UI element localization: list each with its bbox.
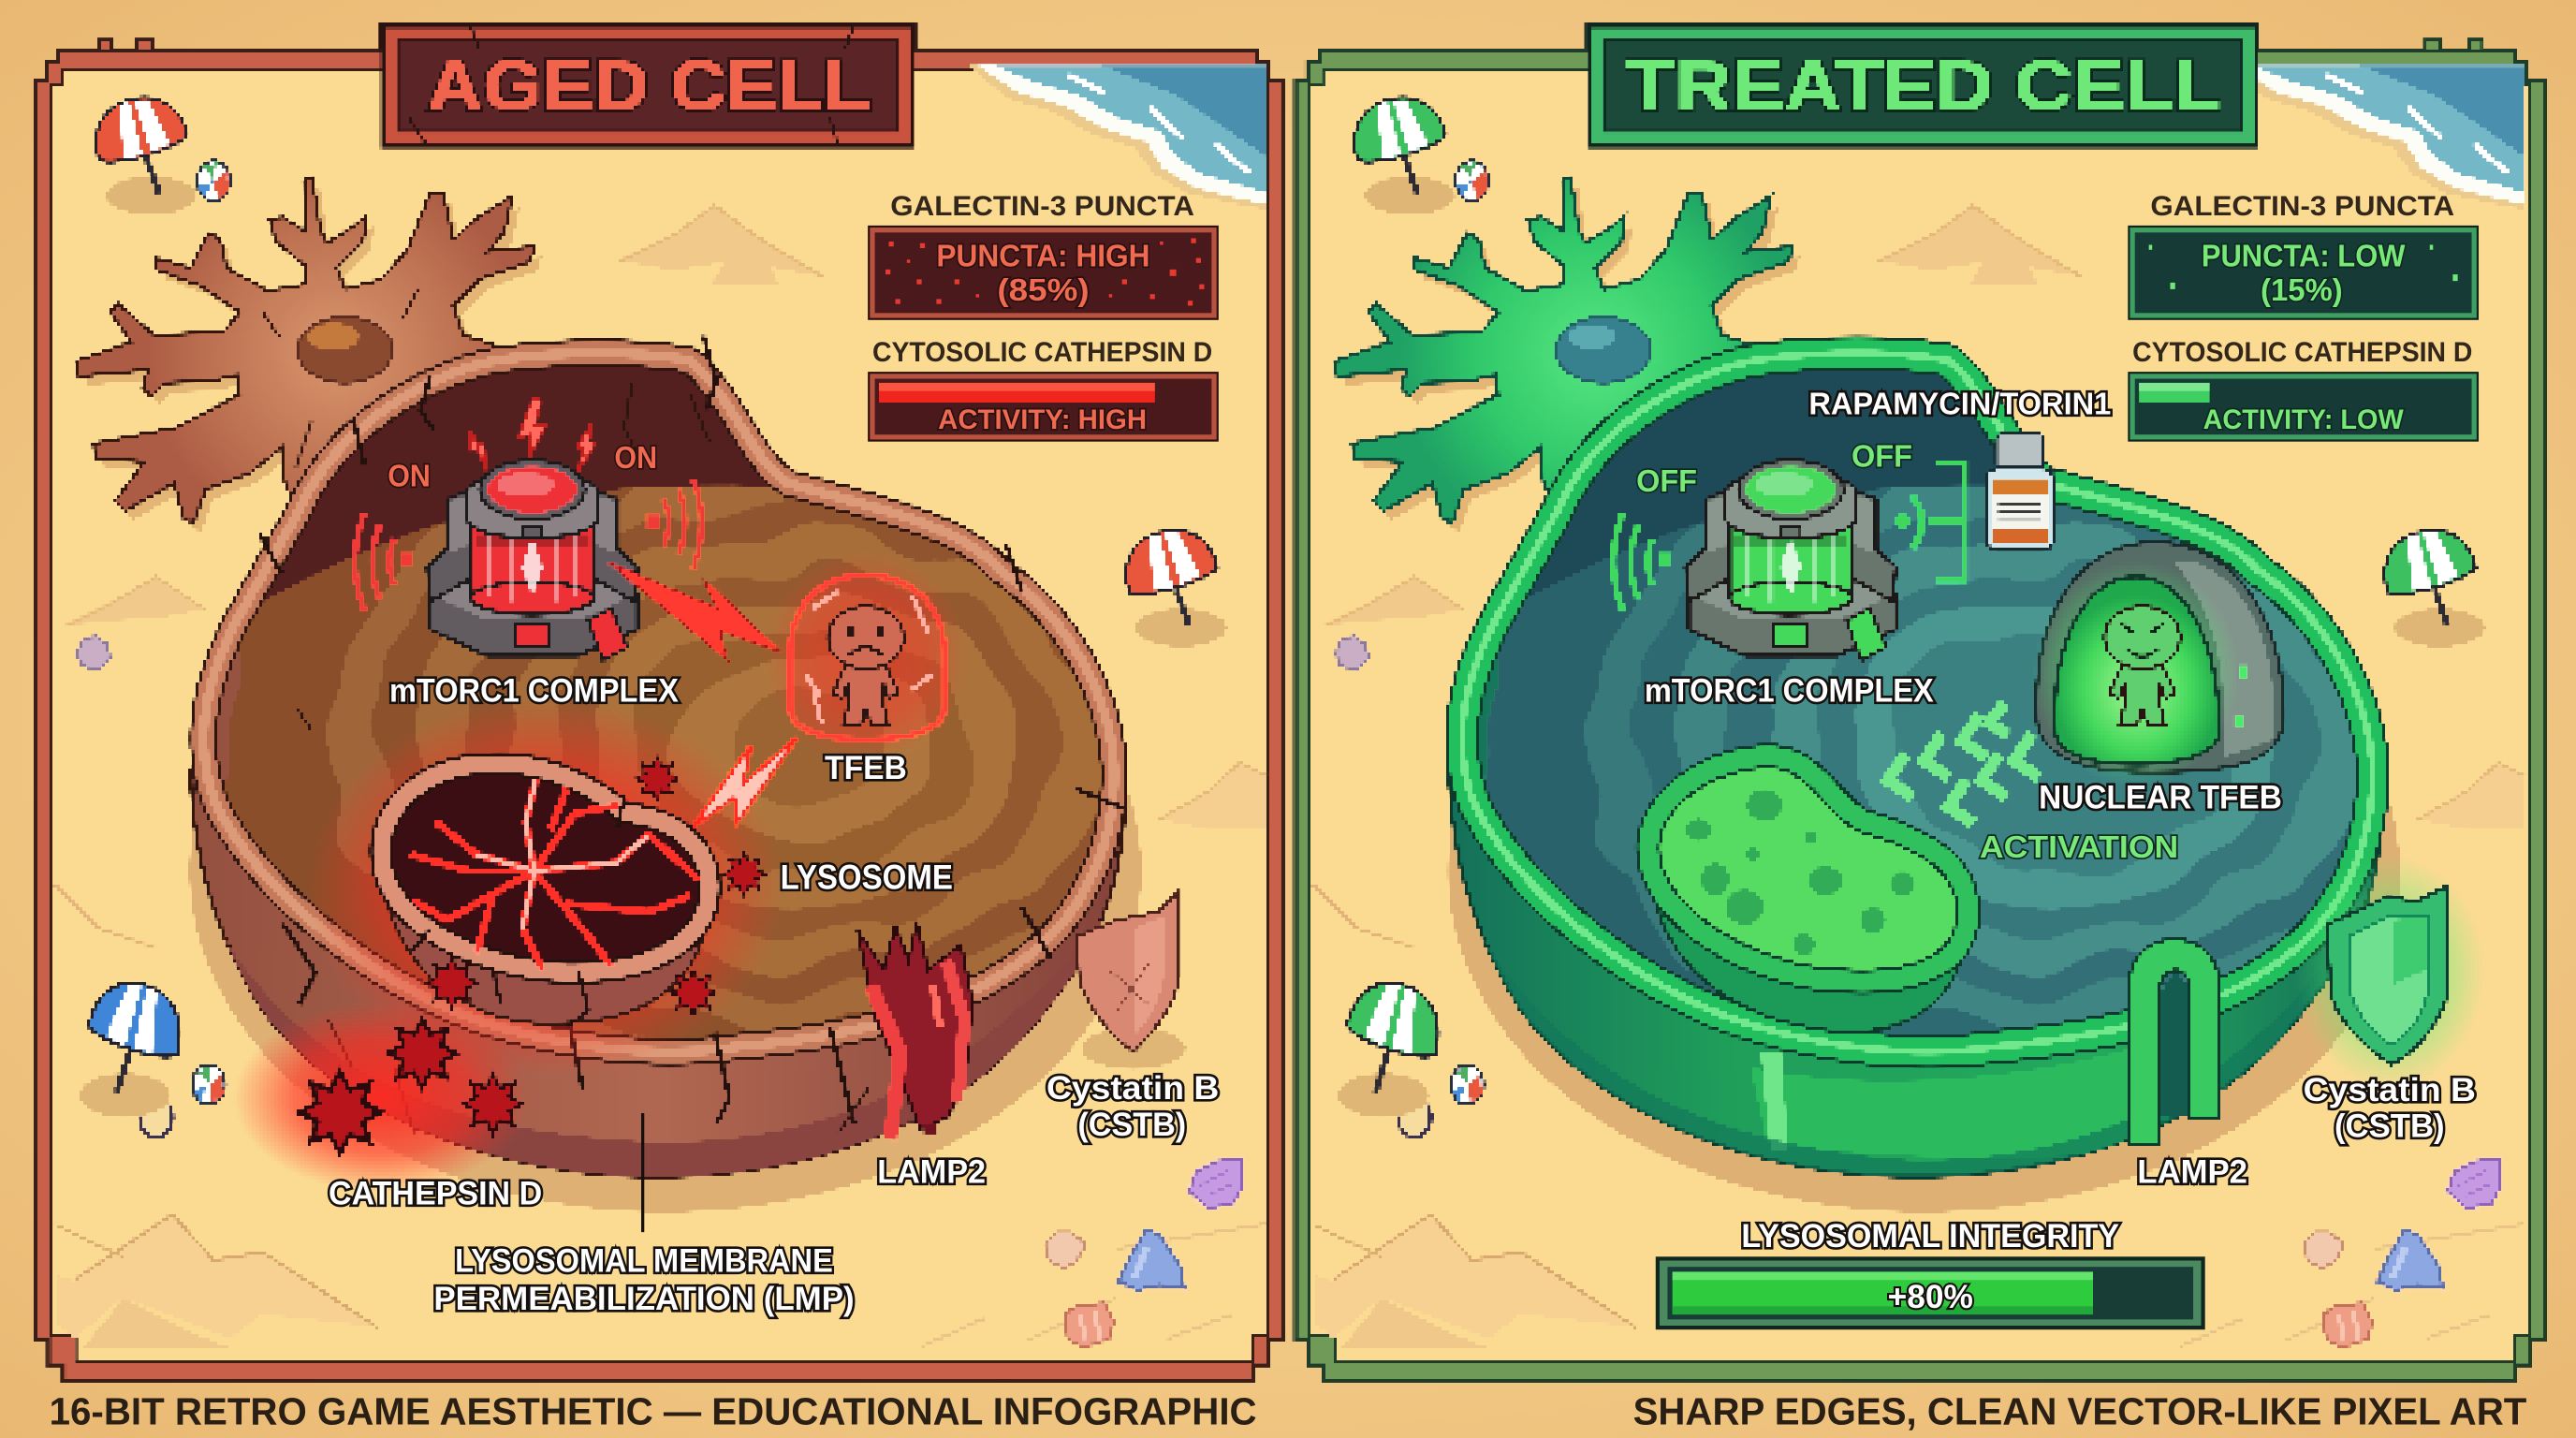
gauge: lysosomal integrity: LYSOSOMAL INTEGRITY [1741, 1218, 2119, 1255]
broken lysosome [381, 764, 710, 1027]
label: LAMP2 aged: LAMP2 [877, 1154, 986, 1191]
drug bottle [1986, 433, 2054, 550]
treated cell labels and HUD [1636, 191, 2478, 1328]
neuron: aged [76, 178, 542, 533]
gauge: lysosomal integrity [1658, 1218, 2203, 1328]
label: cystatin B treated: (CSTB) [2334, 1108, 2445, 1145]
label: lysosome: LYSOSOME [781, 858, 953, 897]
aged cell artwork [37, 26, 1380, 1380]
label: cystatin B treated [2304, 1072, 2476, 1145]
stat: galectin-3 puncta high: (85%) [997, 273, 1090, 308]
label: rapamycin/torin1: RAPAMYCIN/TORIN1 [1808, 387, 2111, 421]
stat: galectin-3 puncta low [2130, 191, 2478, 318]
aged title plate [383, 26, 914, 146]
red cytosolic glow [233, 698, 783, 1193]
treated panel frame [1296, 41, 2545, 1380]
lightning bolts above machine [470, 398, 594, 470]
aged cell labels and HUD [329, 191, 1219, 1317]
stat: cytosolic cathepsin D low: CYTOSOLIC CATHEPSIN D [2132, 337, 2472, 368]
signal: off [1614, 513, 1669, 611]
LAMP2 torn [857, 922, 973, 1140]
label: cathepsin D: CATHEPSIN D [329, 1175, 542, 1211]
label: LAMP2 treated: LAMP2 [2137, 1154, 2247, 1191]
lysosome: healthy [1647, 756, 1969, 1032]
nuclear dome [2034, 542, 2284, 785]
label: ON left: ON [388, 460, 431, 494]
treated beach scenery [1312, 66, 2525, 1347]
label: cystatin B aged: Cystatin B [1046, 1070, 1219, 1107]
activity signals: on [355, 479, 701, 611]
leader line LMP [643, 1112, 645, 1234]
stat: galectin-3 puncta high: GALECTIN-3 PUNCTA [890, 191, 1194, 222]
panel: aged cell [37, 26, 1380, 1380]
stat: cytosolic cathepsin D low [2130, 337, 2478, 440]
label: mTORC1 aged: mTORC1 COMPLEX [389, 672, 679, 709]
stat: galectin-3 puncta high [869, 191, 1218, 318]
inhibitor bracket [1895, 463, 1965, 580]
stat: cytosolic cathepsin D high [869, 337, 1218, 440]
mTORC1 machine: active [427, 460, 637, 661]
label: lysosomal membrane permeabilization: LYSOSOMAL MEMBRANE [455, 1242, 833, 1279]
label: nuclear TFEB: NUCLEAR TFEB [2039, 780, 2282, 816]
treated cell artwork [1296, 26, 2576, 1380]
label: cystatin B treated: Cystatin B [2304, 1072, 2476, 1108]
aged cell body [188, 334, 1142, 1213]
label: activation: ACTIVATION [1980, 830, 2178, 865]
activation chevrons [1888, 703, 2039, 823]
label: cystatin B aged [1046, 1070, 1219, 1143]
inhibition bolt to TFEB [607, 562, 782, 661]
label: lysosomal membrane permeabilization: PERMEABILIZATION (LMP) [433, 1281, 855, 1317]
treated title plate: TREATED CELL [1627, 47, 2221, 125]
stat: cytosolic cathepsin D high: ACTIVITY: HIGH [938, 404, 1147, 435]
LAMP2 intact [2130, 939, 2219, 1145]
label: lysosomal membrane permeabilization [433, 1242, 855, 1317]
panel: treated cell [1296, 26, 2576, 1380]
stat: galectin-3 puncta low: GALECTIN-3 PUNCTA [2150, 191, 2454, 222]
label: OFF right: OFF [1852, 439, 1912, 474]
footer caption left: 16-BIT RETRO GAME AESTHETIC — EDUCATIONAL INFOGRAPHIC [50, 1390, 1257, 1433]
aged beach scenery [54, 66, 1266, 1347]
aged title plate: AGED CELL [427, 47, 871, 125]
aged panel frame [37, 41, 1281, 1380]
stat: galectin-3 puncta low: PUNCTA: LOW [2202, 239, 2406, 273]
label: mTORC1 treated: mTORC1 COMPLEX [1645, 672, 1934, 709]
label: ON right: ON [614, 441, 657, 476]
cystatin B shield: cracked [1076, 890, 1186, 1070]
mTORC1 machine: inhibited [1686, 460, 1895, 661]
cystatin B shield: glowing [2295, 855, 2485, 1091]
stat: cytosolic cathepsin D high: CYTOSOLIC CATHEPSIN D [872, 337, 1212, 368]
gauge: lysosomal integrity: +80% [1888, 1279, 1973, 1315]
cathepsin D particles [299, 757, 766, 1153]
treated title plate [1588, 26, 2256, 146]
stat: cytosolic cathepsin D low: ACTIVITY: LOW [2203, 404, 2405, 435]
footer caption right: SHARP EDGES, CLEAN VECTOR-LIKE PIXEL ART [1633, 1390, 2527, 1433]
label: OFF left: OFF [1636, 464, 1697, 499]
neuron: treated [1334, 178, 1801, 533]
label: TFEB: TFEB [825, 750, 907, 786]
treated cell body [1446, 334, 2400, 1213]
TFEB trapped figure [764, 552, 968, 762]
stat: galectin-3 puncta low: (15%) [2261, 273, 2343, 308]
stat: galectin-3 puncta high: PUNCTA: HIGH [936, 239, 1150, 273]
label: cystatin B aged: (CSTB) [1077, 1107, 1186, 1143]
bolt to lysosome [694, 738, 797, 827]
